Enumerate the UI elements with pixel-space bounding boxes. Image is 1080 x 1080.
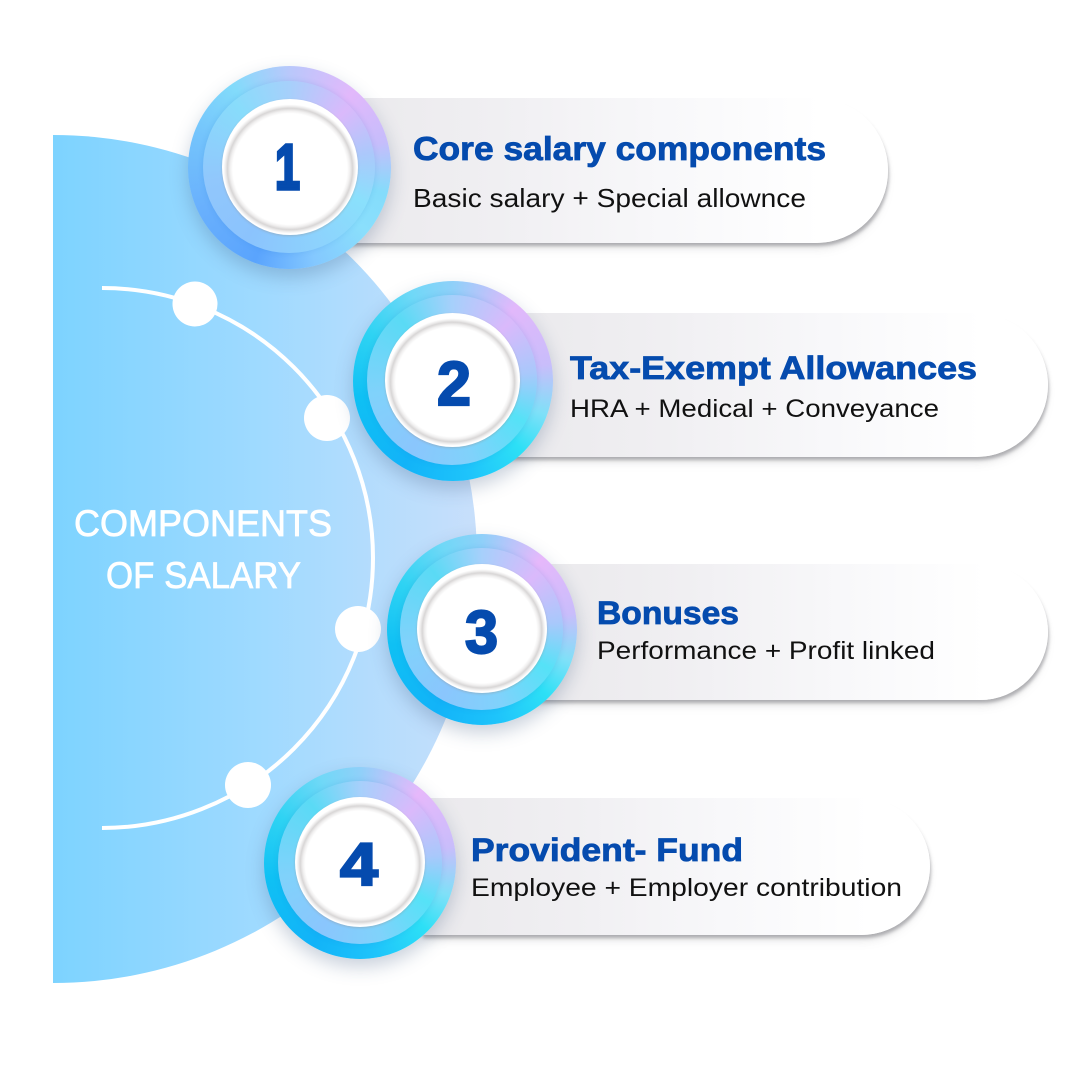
step 2 text: HRA + Medical + Conveyance: [570, 395, 939, 423]
white plate: [295, 797, 425, 927]
white plate: [417, 564, 547, 693]
step 4 text: Provident- Fund: [471, 832, 743, 868]
card 1 background: [330, 98, 888, 243]
inner ring: [278, 781, 442, 944]
icon: number 1 ring: [188, 66, 391, 269]
panel: blue semicircle with timeline arc and title: COMPONENTS: [74, 503, 332, 544]
step 1 text: 1: [275, 131, 300, 203]
panel: blue semicircle with timeline arc and title: OF SALARY: [106, 555, 301, 596]
card 3 background: [530, 564, 1048, 700]
step 1 text: Basic salary + Special allownce: [413, 183, 806, 213]
icon: number 2 ring: [353, 281, 553, 481]
inner ring: [203, 81, 375, 253]
card 2 background: [500, 313, 1048, 457]
inner ring: [400, 548, 563, 710]
card 4 background: [420, 798, 930, 935]
step 3 text: Bonuses: [597, 595, 739, 631]
step 1 text: Core salary components: [413, 130, 826, 167]
step 4 text: Employee + Employer contribution: [471, 874, 902, 902]
step 4 text: 4: [340, 831, 379, 898]
white plate: [222, 99, 358, 235]
step 3 text: 3: [465, 599, 498, 666]
icon: number 3 ring: [387, 534, 577, 725]
step 3 text: Performance + Profit linked: [597, 637, 935, 665]
icon: number 4 ring: [264, 767, 456, 959]
step 2 text: Tax-Exempt Allowances: [570, 350, 977, 386]
white plate: [385, 313, 520, 447]
step 2 text: 2: [437, 350, 471, 419]
inner ring: [367, 295, 537, 465]
